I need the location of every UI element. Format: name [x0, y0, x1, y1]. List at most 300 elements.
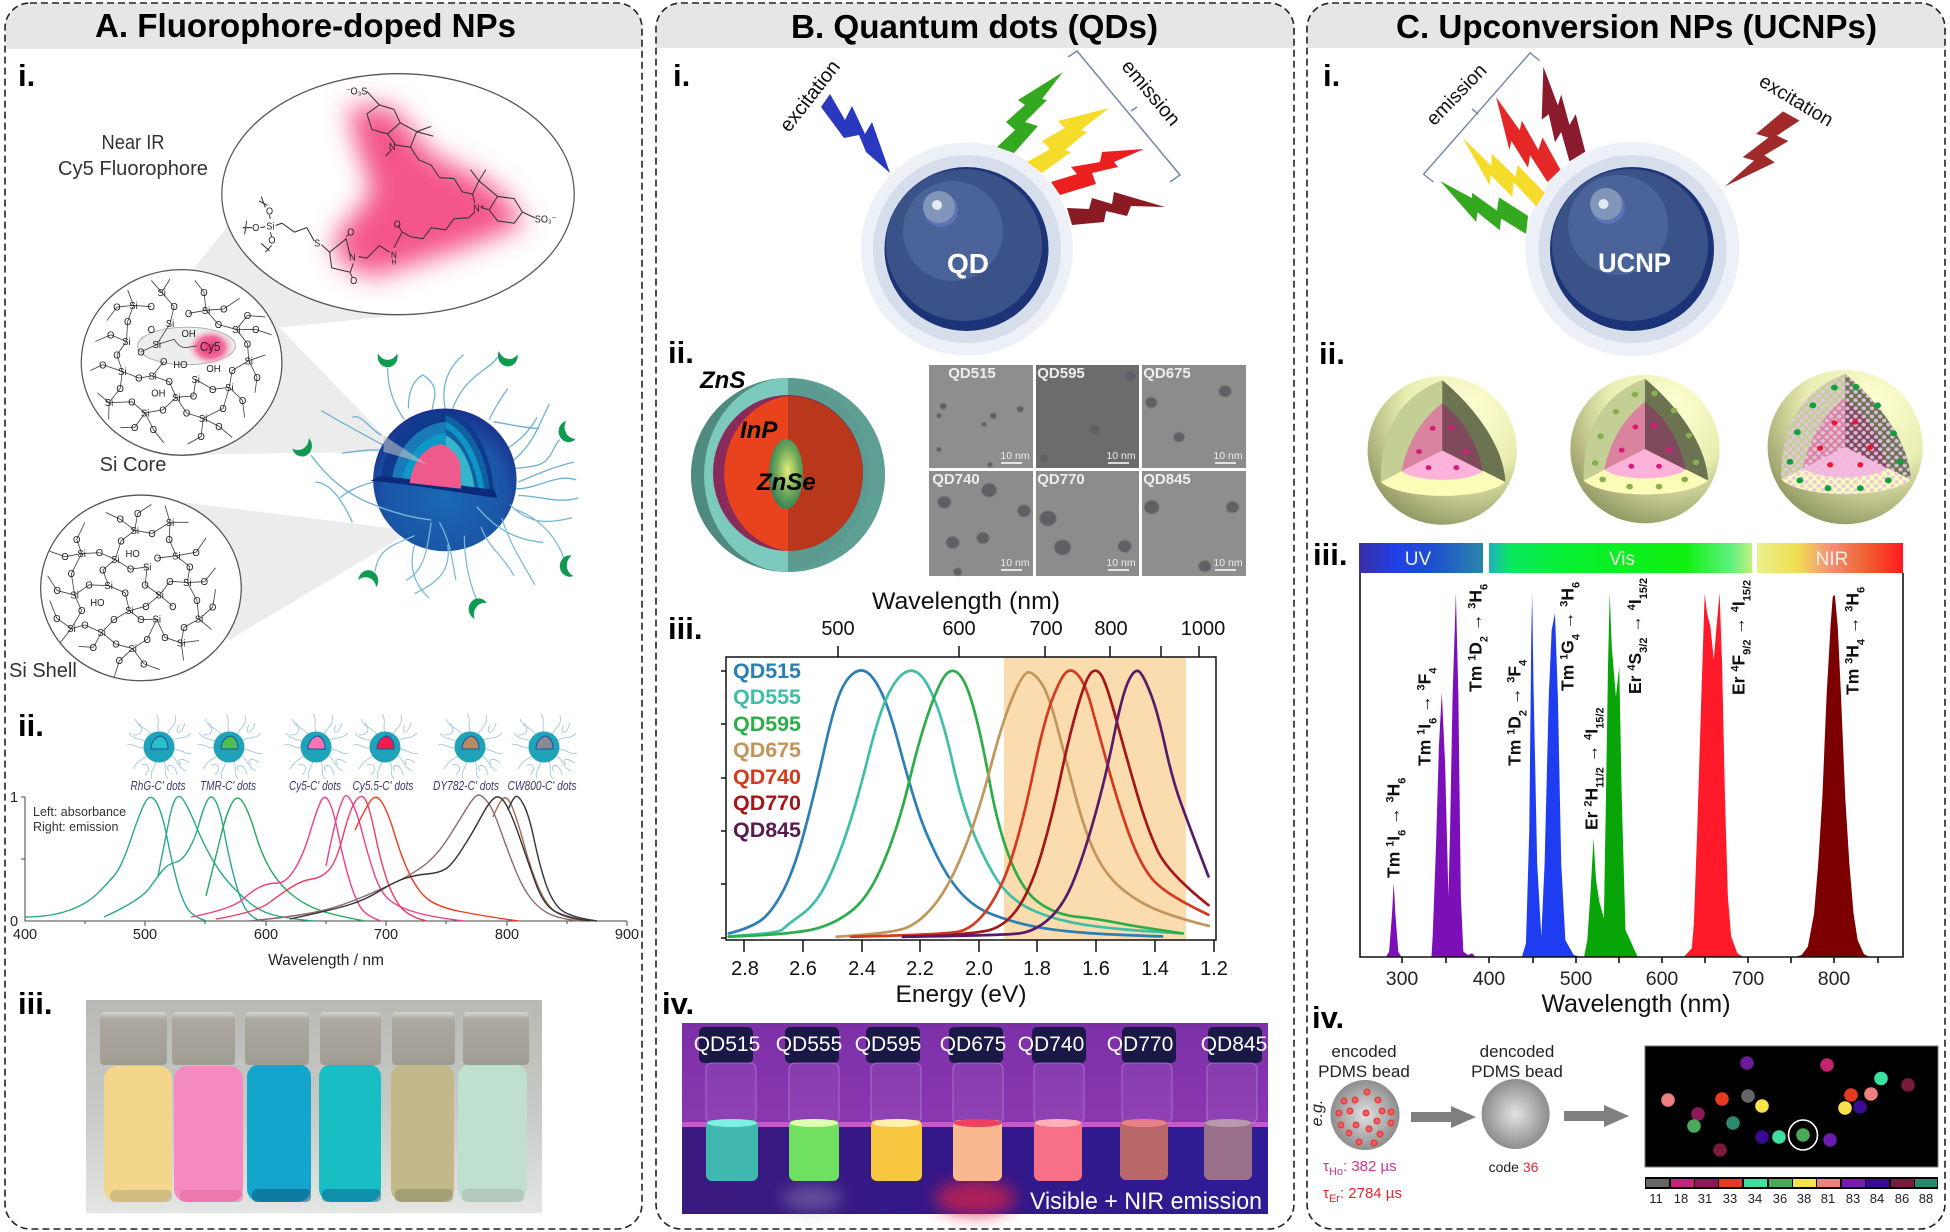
UCNP label: UCNP	[1598, 248, 1671, 278]
core atom labels: O	[107, 330, 115, 341]
QD label: QD	[947, 248, 989, 279]
tick labels: 500	[1560, 968, 1592, 990]
core atom labels: O	[148, 325, 155, 336]
spectra	[1386, 593, 1870, 957]
shell atom labels: O	[112, 639, 120, 651]
lifetime values: Er	[1329, 1193, 1340, 1205]
transition labels: Tm 1D2 → 3H6	[1466, 584, 1491, 692]
TEM scale bars: 10 nm	[1213, 450, 1243, 462]
code numbers: 11	[1649, 1191, 1663, 1206]
shell atom labels: O	[166, 576, 174, 588]
vial names: QD515	[694, 1033, 760, 1056]
core atom labels	[99, 288, 261, 443]
core atom labels: O	[215, 422, 223, 433]
shell atom labels: O	[117, 514, 124, 526]
label iv: iv.	[662, 986, 694, 1021]
energy tick labels: 2.4	[848, 958, 876, 980]
core atom labels: O	[183, 408, 191, 420]
text: Near IR Cy5 Fluorophore	[58, 132, 208, 180]
code numbers: 86	[1895, 1191, 1909, 1206]
text: Si Shell: Si Shell	[9, 660, 77, 682]
vial names: QD675	[940, 1033, 1006, 1056]
legend	[733, 660, 801, 842]
shell atom labels: Si	[67, 624, 76, 635]
bead image	[1645, 1046, 1938, 1167]
shell atom labels: O	[193, 596, 201, 607]
encoded bead	[1330, 1080, 1400, 1150]
code numbers: 18	[1674, 1191, 1688, 1206]
C' dot names: Cy5-C' dots	[289, 779, 341, 793]
axis labels: 500	[133, 927, 157, 943]
ZnSe label: ZnSe	[756, 469, 816, 496]
shell atom labels: O	[134, 509, 142, 520]
core atom labels: O	[131, 422, 139, 434]
core atom labels: Si	[225, 383, 234, 394]
energy tick labels: 2.6	[789, 958, 817, 980]
shell atom labels: O	[141, 580, 149, 591]
nanoparticle architectures	[1368, 370, 1923, 525]
shell atom labels: O	[148, 529, 156, 540]
connecting beam	[384, 435, 427, 464]
molecule ellipse: N	[349, 252, 356, 264]
core atom labels: O	[137, 347, 145, 358]
shell atom labels: Si	[97, 628, 106, 639]
legend: QD515	[733, 660, 801, 683]
vial photo	[86, 1000, 542, 1213]
molecule ellipse: O	[268, 235, 276, 247]
shell atom labels: Si	[166, 518, 174, 529]
shell atom labels: Si	[125, 606, 134, 617]
frame and ticks	[721, 646, 1216, 952]
core atom labels: O	[99, 360, 107, 371]
core shell diagram	[691, 367, 885, 572]
axis title: Wavelength / nm	[268, 952, 384, 969]
molecule ellipse: N⁺	[473, 203, 485, 215]
molecule ellipse: O	[394, 219, 401, 231]
sphere 2: core and shell doped	[1570, 375, 1720, 523]
core atom labels: O	[190, 391, 198, 403]
core atom labels: O	[170, 302, 178, 313]
code numbers	[1649, 1191, 1933, 1206]
transition labels: Er 2H11/2 → 4I15/2	[1582, 707, 1607, 830]
shell atom labels: Si	[128, 644, 137, 655]
molecule ellipse	[222, 74, 574, 315]
panel C frame	[1307, 3, 1945, 1229]
shell atom labels: O	[127, 564, 135, 576]
emission bolts	[1440, 67, 1585, 234]
PEG hairs over the particle	[373, 504, 572, 600]
shell atom labels: Si	[172, 551, 180, 562]
core atom labels: Si	[122, 337, 131, 348]
lifetime values: Ho	[1329, 1166, 1343, 1178]
axis labels: 600	[254, 927, 278, 943]
core atom labels: O	[150, 425, 157, 436]
empty vial glass	[706, 1063, 1257, 1123]
core atom labels: O	[160, 357, 168, 368]
shell atom labels: O	[143, 635, 151, 646]
TEM labels: QD515	[948, 365, 996, 382]
core atom labels: Si	[148, 371, 157, 383]
core atom labels: O	[135, 373, 143, 385]
vial names	[694, 1033, 1267, 1056]
core atom labels: Si	[172, 393, 180, 404]
core atom labels: O	[117, 384, 124, 395]
core atom labels: Si	[152, 340, 161, 351]
shell atom labels: HO	[126, 549, 140, 560]
red glow	[935, 1180, 1015, 1216]
core atom labels: Cy5	[200, 339, 221, 354]
wavelength tick labels: 700	[1029, 618, 1063, 640]
pale glow	[782, 1185, 842, 1211]
C' dot names: TMR-C' dots	[200, 779, 256, 793]
core atom labels: O	[185, 309, 193, 320]
legend: QD740	[733, 766, 801, 789]
molecule ellipse: S	[314, 238, 320, 250]
lifetime values: τ	[1323, 1185, 1329, 1202]
label iii: iii.	[1313, 537, 1347, 572]
transition labels: Tm 3H4 → 3H6	[1842, 587, 1868, 695]
shell atom labels: O	[68, 569, 75, 580]
Cy5 structure	[243, 92, 535, 278]
shell atom labels: O	[140, 659, 148, 670]
molecule ellipse: N	[389, 142, 396, 153]
arrow 1	[1411, 1106, 1476, 1128]
C' dot names: Cy5.5-C' dots	[352, 779, 414, 793]
energy tick labels: 2.2	[906, 958, 934, 980]
molecule ellipse: SO₃⁻	[535, 214, 556, 225]
core atom labels: Si	[191, 375, 200, 386]
TEM scale bars: 10 nm	[1106, 450, 1136, 462]
transition labels	[1384, 578, 1868, 878]
zoom cones	[182, 223, 415, 641]
legend: QD675	[733, 739, 801, 762]
label i: i.	[1323, 58, 1340, 93]
panel A frame	[5, 3, 642, 1229]
Si core circle	[81, 270, 282, 455]
lifetime values	[1323, 1158, 1402, 1205]
barcode decoding example	[1309, 1042, 1938, 1206]
core bonds	[90, 279, 272, 444]
shell atom labels: O	[186, 562, 194, 574]
core atom labels: Si	[118, 367, 127, 378]
shell atom labels: O	[99, 565, 107, 577]
region labels: UV	[1405, 549, 1432, 570]
vial caps	[699, 1027, 1262, 1063]
PEG hairs behind the particle	[311, 355, 578, 522]
core atom labels: O	[244, 311, 252, 322]
panel A: Fluorophore-doped NPs	[5, 3, 642, 1229]
e.g. label: e.g.	[1309, 1100, 1326, 1126]
shell atom labels: Si	[143, 562, 151, 574]
transition labels: Tm 1I6 → 3F4	[1415, 667, 1440, 766]
core atom labels: O	[165, 377, 173, 388]
label ii: ii.	[18, 708, 44, 743]
axis labels	[10, 790, 639, 943]
pink glow	[332, 107, 527, 277]
code legend strip	[1645, 1177, 1938, 1206]
shell atom labels: O	[122, 588, 129, 599]
sphere 1: core doped	[1368, 376, 1517, 525]
TEM scale bars: 10 nm	[1000, 557, 1030, 569]
panel C title band	[1307, 3, 1945, 48]
emission bolts	[997, 72, 1165, 225]
code numbers: 34	[1748, 1191, 1762, 1206]
shell atom labels: Si	[152, 614, 161, 626]
core atom labels: OH	[206, 364, 221, 375]
tick labels: 700	[1732, 968, 1764, 990]
core atom labels: Si	[166, 319, 174, 330]
ZnS label: ZnS	[699, 367, 745, 394]
Cy5 halo	[138, 327, 235, 365]
code text: code 36	[1489, 1159, 1539, 1175]
label iii: iii.	[668, 611, 702, 646]
shell atom labels: Si	[195, 614, 203, 626]
core atom labels: Si	[245, 356, 253, 367]
QD sphere	[861, 142, 1073, 356]
axis labels: 700	[374, 927, 398, 943]
core atom labels: O	[239, 396, 247, 407]
TEM scale bars	[1000, 450, 1243, 570]
C' dot names	[130, 779, 576, 793]
InP label: InP	[740, 417, 778, 444]
TEM labels: QD675	[1143, 365, 1191, 382]
region labels: NIR	[1816, 549, 1848, 570]
molecule ellipse: O	[252, 223, 259, 234]
shell atom labels: O	[81, 620, 89, 632]
core atom labels: Si	[157, 288, 166, 299]
core atom labels: O	[252, 325, 260, 336]
vial bottoms	[110, 1189, 524, 1202]
spectra curves	[25, 797, 207, 921]
heading B: B. Quantum dots (QDs)	[791, 8, 1158, 45]
shell atom labels: O	[154, 553, 162, 565]
UCNP sphere	[1526, 142, 1740, 356]
horizontal rim	[375, 478, 495, 496]
code numbers: 33	[1723, 1191, 1737, 1206]
emission text: emission	[1422, 60, 1491, 130]
wavelength tick labels: 800	[1094, 618, 1128, 640]
core atom labels: Si	[105, 398, 113, 409]
panel B frame	[656, 3, 1294, 1229]
label i: i.	[18, 58, 35, 93]
vial caps	[100, 1012, 529, 1065]
excitation text: excitation	[776, 56, 845, 136]
shell atom labels: O	[180, 622, 188, 634]
shell bonds	[48, 504, 216, 678]
vial names: QD740	[1018, 1033, 1084, 1056]
liquid menisci	[707, 1119, 1251, 1127]
TEM labels	[932, 365, 1191, 488]
TEM particles	[936, 372, 1239, 576]
label i: i.	[673, 58, 690, 93]
vial names: QD555	[776, 1033, 842, 1056]
axis labels: 800	[495, 927, 519, 943]
heading C: C. Upconversion NPs (UCNPs)	[1396, 8, 1877, 45]
tick labels: 600	[1646, 968, 1678, 990]
core atom labels: Si	[129, 301, 138, 312]
transition labels: Tm 1G4 → 3H6	[1558, 582, 1583, 691]
panel B: Quantum dots	[656, 3, 1294, 1229]
core atom labels: O	[113, 302, 121, 314]
label ii: ii.	[668, 335, 694, 370]
lifetime values: : 2784 µs	[1340, 1185, 1402, 1202]
dencoded text: PDMS bead	[1471, 1062, 1563, 1081]
core atom labels: Si	[232, 325, 241, 336]
absorbance and emission chart	[10, 790, 639, 969]
core atom labels: Si	[141, 408, 149, 420]
shell atom labels: O	[54, 586, 61, 597]
axes	[21, 797, 627, 926]
QD emission chart	[721, 588, 1228, 1008]
C' dot names: RhG-C' dots	[130, 779, 186, 793]
C' dot names: DY782-C' dots	[433, 779, 499, 793]
molecule ellipse: O	[350, 276, 357, 287]
transition labels: Er 4F9/2 → 4I15/2	[1728, 580, 1753, 695]
shell atom labels: Si	[155, 590, 164, 602]
axis labels: 900	[615, 927, 639, 943]
vial names: QD845	[1201, 1033, 1267, 1056]
shell atom labels: Si	[77, 549, 86, 560]
TEM labels: QD845	[1143, 471, 1191, 488]
panel C: Upconversion NPs	[1307, 3, 1945, 1229]
highlight ring	[1788, 1120, 1818, 1150]
panel A title band	[5, 3, 642, 49]
core atom labels: HO	[173, 360, 188, 371]
excitation bolt	[821, 94, 890, 173]
cutaway shells	[381, 410, 494, 495]
wavelength axis title: Wavelength (nm)	[872, 588, 1060, 615]
code numbers: 88	[1919, 1191, 1933, 1206]
shell atom labels: O	[90, 643, 97, 654]
silica nanoparticle schematic with zoom-in circles	[41, 74, 578, 681]
shell atom labels: Si	[177, 638, 185, 649]
Cy5 dye spot	[188, 329, 233, 365]
energy tick labels: 2.0	[965, 958, 993, 980]
emission bracket	[1068, 51, 1180, 182]
shell atom labels: Si	[183, 578, 192, 589]
TEM scale bars: 10 nm	[1106, 557, 1136, 569]
core atom labels: O	[215, 320, 222, 331]
tick labels: 400	[1473, 968, 1505, 990]
chart note: Right: emission	[33, 820, 118, 834]
label iii: iii.	[18, 986, 52, 1021]
chart note: Left: absorbance	[33, 805, 126, 819]
TEM scale bars: 10 nm	[1213, 557, 1243, 569]
label iv: iv.	[1312, 1000, 1344, 1035]
core atom labels: Si	[202, 306, 210, 317]
axis labels: 400	[13, 927, 37, 943]
shell atom labels: Si	[104, 581, 113, 592]
pink core	[410, 444, 461, 489]
core atom labels: O	[244, 339, 252, 350]
tick labels: 300	[1386, 968, 1418, 990]
QD vials under UV photo	[682, 1023, 1268, 1216]
shell atom labels: O	[192, 547, 200, 559]
transition labels: Tm 1D2 → 3F4	[1505, 659, 1530, 766]
decoded bead	[1482, 1079, 1550, 1149]
molecule ellipse: N	[391, 250, 397, 260]
core atom labels: O	[253, 372, 261, 384]
code numbers: 84	[1870, 1191, 1884, 1206]
shell atom labels: O	[116, 656, 123, 667]
energy tick labels: 1.6	[1082, 958, 1110, 980]
code numbers: 81	[1821, 1191, 1835, 1206]
energy tick labels: 2.8	[731, 958, 759, 980]
shell atom labels: O	[169, 601, 177, 613]
wavelength tick labels: 600	[942, 618, 976, 640]
axis title: Wavelength (nm)	[1542, 990, 1730, 1018]
shell atom labels: O	[78, 606, 86, 617]
heading A: A. Fluorophore-doped NPs	[95, 7, 516, 44]
text: Si Core: Si Core	[100, 454, 166, 476]
code numbers: 38	[1797, 1191, 1811, 1206]
spectral region bar	[1359, 543, 1903, 573]
text: Near IR Cy5 Fluorophore: Near IR	[102, 132, 164, 154]
tick labels: 800	[1818, 968, 1850, 990]
shell atom labels: O	[201, 577, 208, 588]
core atom labels: O	[128, 397, 136, 408]
vial names: QD770	[1107, 1033, 1173, 1056]
Si shell circle	[41, 495, 241, 681]
core atom labels: O	[159, 405, 167, 416]
legend: QD595	[733, 713, 801, 736]
shell atom labels: O	[209, 602, 217, 614]
core atom labels: O	[219, 404, 227, 415]
spectra	[729, 670, 1209, 937]
legend: QD770	[733, 792, 801, 815]
shell atom labels: O	[85, 580, 93, 591]
core atom labels: Si	[199, 414, 207, 425]
transition labels: Er 4S3/2 → 4I15/2	[1625, 578, 1650, 694]
energy tick labels: 1.2	[1200, 958, 1228, 980]
shell atom labels: O	[53, 614, 61, 625]
axes and ticks	[1360, 573, 1903, 963]
tick labels	[1386, 968, 1850, 990]
excitation text: excitation	[1755, 70, 1837, 132]
wavelength tick labels: 500	[821, 618, 855, 640]
energy tick labels: 1.4	[1141, 958, 1169, 980]
core atom labels: O	[148, 302, 155, 313]
text: Near IR Cy5 Fluorophore: Cy5 Fluorophore	[58, 158, 208, 180]
region labels: Vis	[1609, 549, 1635, 570]
lifetime values: τ	[1323, 1158, 1329, 1175]
molecule ellipse: H	[391, 259, 396, 266]
shell atom labels: O	[165, 535, 173, 546]
shell atom labels: O	[73, 535, 81, 546]
TEM labels: QD770	[1037, 471, 1085, 488]
core atom labels: O	[113, 350, 121, 362]
sphere 3: lattice view	[1768, 370, 1923, 524]
shell atom labels: HO	[90, 598, 105, 609]
shell atom labels: Si	[131, 526, 139, 537]
shell atom labels: Si	[111, 555, 119, 566]
TEM labels: QD595	[1037, 365, 1085, 382]
excitation bolt	[1725, 111, 1800, 186]
core atom labels: O	[220, 304, 228, 316]
C' dot mini icons	[127, 714, 577, 779]
wavelength tick labels: 1000	[1181, 618, 1225, 640]
axis labels: 1	[10, 790, 18, 806]
shell atom labels: O	[142, 601, 150, 613]
region labels	[1405, 549, 1848, 570]
legend: QD555	[733, 686, 801, 709]
core atom labels: O	[124, 317, 132, 328]
liquid fluorescence	[706, 1120, 1252, 1181]
NIR band	[1004, 657, 1186, 940]
code numbers: 83	[1846, 1191, 1860, 1206]
molecule ellipse: ⁻O₃S	[346, 86, 367, 98]
axis labels: 0	[10, 914, 18, 930]
